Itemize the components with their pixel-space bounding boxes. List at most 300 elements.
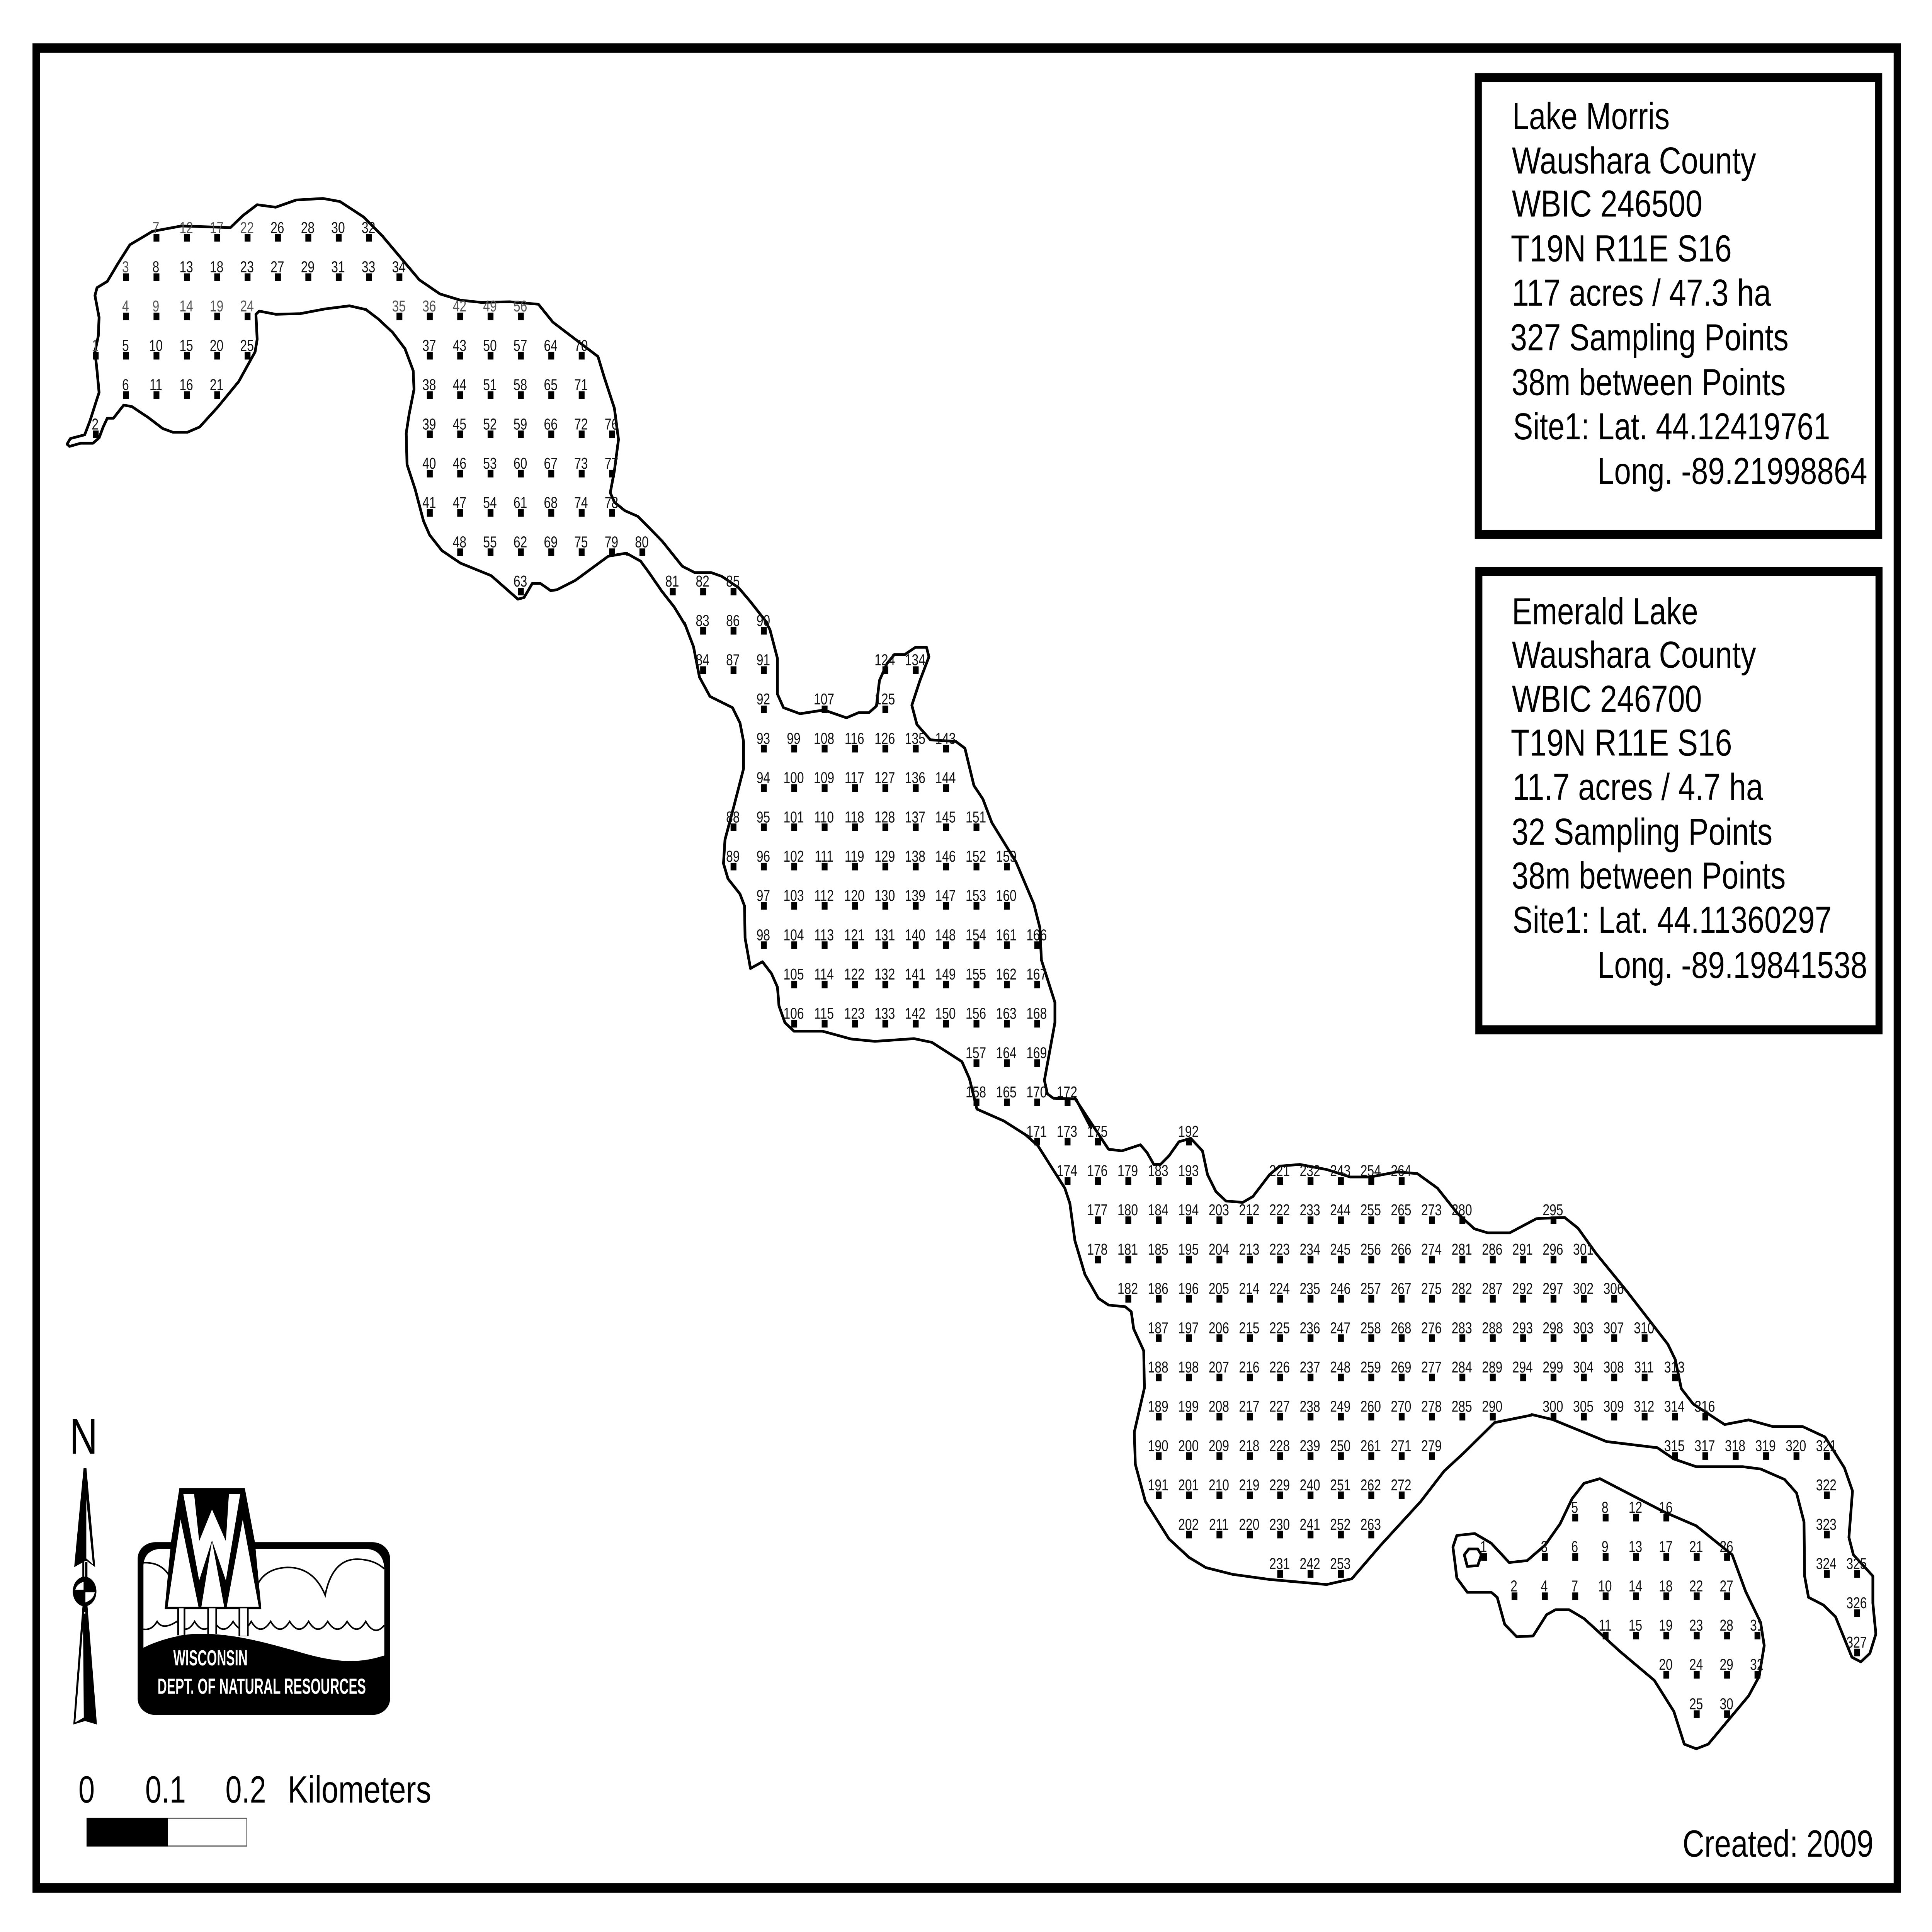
- sampling points: Lake Morris 1-327: 26: [270, 219, 284, 236]
- sampling points: Lake Morris 1-327: 290: [1482, 1398, 1502, 1415]
- sampling points: Lake Morris 1-327: 199: [1178, 1398, 1199, 1415]
- sampling points: Lake Morris 1-327: 123: [844, 1005, 865, 1022]
- sampling points: Lake Morris 1-327: 303: [1573, 1319, 1594, 1337]
- sampling points: Lake Morris 1-327: 44: [453, 376, 466, 394]
- sampling points: Lake Morris 1-327: 170: [1026, 1083, 1047, 1101]
- sampling points: Lake Morris 1-327: 241: [1300, 1515, 1320, 1533]
- panel: Emerald Lake info: [1479, 571, 1879, 1030]
- sampling points: Lake Morris 1-327: 261: [1361, 1437, 1381, 1454]
- text block: Emerald Lake details: 11.7 acres / 4.7 ha: [1512, 766, 1764, 808]
- sampling points: Lake Morris 1-327: 285: [1452, 1398, 1472, 1415]
- logo text: Dept. of Natural Resources: DEPT. OF NATURAL RESOURCES: [158, 1674, 366, 1699]
- sampling points: Lake Morris 1-327: 165: [996, 1083, 1017, 1101]
- sampling points: Lake Morris 1-327: 192: [1178, 1122, 1199, 1140]
- sampling points: Lake Morris 1-327: 63: [514, 572, 527, 590]
- sampling points: Lake Morris 1-327: 173: [1057, 1122, 1077, 1140]
- sampling points: Lake Morris 1-327: 213: [1239, 1240, 1259, 1258]
- sampling points: Lake Morris 1-327: 176: [1087, 1162, 1108, 1179]
- sampling points: Lake Morris 1-327: 106: [783, 1005, 804, 1022]
- sampling points: Lake Morris 1-327: 139: [905, 887, 925, 905]
- sampling points: Lake Morris 1-327: 137: [905, 808, 925, 826]
- sampling points: Lake Morris 1-327: 203: [1209, 1201, 1229, 1219]
- sampling points: Lake Morris 1-327: 86: [726, 612, 740, 629]
- sampling points: Lake Morris 1-327: 270: [1391, 1398, 1411, 1415]
- logo: Wisconsin DNR: [138, 1488, 390, 1715]
- sampling points: Lake Morris 1-327: 299: [1543, 1358, 1563, 1376]
- sampling points: Lake Morris 1-327: 280: [1452, 1201, 1472, 1219]
- sampling points: Lake Morris 1-327: 234: [1300, 1240, 1320, 1258]
- sampling points: Lake Morris 1-327: 327: [1846, 1633, 1867, 1651]
- shoreline: Lake Morris western lobe north shore: [67, 199, 619, 502]
- sampling points: Emerald Lake 1-32: 3: [1541, 1538, 1548, 1556]
- sampling points: Lake Morris 1-327: 233: [1300, 1201, 1320, 1219]
- sampling points: Lake Morris 1-327: 298: [1543, 1319, 1563, 1337]
- sampling points: Lake Morris 1-327: 25: [240, 337, 254, 354]
- sampling points: Lake Morris 1-327: 18: [210, 258, 223, 276]
- sampling points: Lake Morris 1-327: 314: [1664, 1398, 1685, 1415]
- text block: Lake Morris details: [1510, 140, 1867, 492]
- sampling points: Lake Morris 1-327: 191: [1148, 1476, 1168, 1494]
- sampling points: Lake Morris 1-327: 204: [1209, 1240, 1229, 1258]
- text block: Emerald Lake details: [1511, 634, 1867, 986]
- sampling points: Lake Morris 1-327: 252: [1330, 1515, 1350, 1533]
- created date: Created: 2009: [1683, 1823, 1873, 1865]
- sampling points: Lake Morris 1-327: 108: [814, 730, 834, 747]
- sampling points: Lake Morris 1-327: 256: [1361, 1240, 1381, 1258]
- sampling points: Lake Morris 1-327: 227: [1269, 1398, 1290, 1415]
- sampling points: Lake Morris 1-327: 273: [1421, 1201, 1442, 1219]
- sampling points: Lake Morris 1-327: 250: [1330, 1437, 1350, 1454]
- sampling points: Lake Morris 1-327: 89: [726, 847, 740, 865]
- sampling points: Lake Morris 1-327: 181: [1117, 1240, 1138, 1258]
- sampling points: Lake Morris 1-327: 79: [605, 533, 618, 551]
- panel border: [1478, 78, 1879, 534]
- sampling points: Emerald Lake 1-32: 18: [1659, 1577, 1673, 1595]
- sampling points: Lake Morris 1-327: 289: [1482, 1358, 1502, 1376]
- sampling points: Lake Morris 1-327: 193: [1178, 1162, 1199, 1179]
- shoreline: narrows south shore: [627, 554, 685, 625]
- sampling points: Lake Morris 1-327: 36: [422, 297, 436, 315]
- sampling points: Emerald Lake 1-32: 9: [1602, 1538, 1609, 1556]
- sampling points: Lake Morris 1-327: 54: [483, 494, 497, 512]
- sampling points: Lake Morris 1-327: 167: [1026, 965, 1047, 983]
- sampling points: Lake Morris 1-327: 274: [1421, 1240, 1442, 1258]
- sampling points: Lake Morris 1-327: 196: [1178, 1280, 1199, 1298]
- text block: Emerald Lake details: 38m between Points: [1512, 855, 1786, 897]
- sampling points: Lake Morris 1-327: 116: [845, 730, 864, 747]
- sampling points: Lake Morris 1-327: [92, 219, 1867, 1656]
- sampling points: Lake Morris 1-327: 4: [122, 297, 129, 315]
- sampling points: Lake Morris 1-327: 272: [1391, 1476, 1411, 1494]
- sampling points: Lake Morris 1-327: 286: [1482, 1240, 1502, 1258]
- sampling points: Lake Morris 1-327: 113: [814, 926, 834, 944]
- sampling points: Lake Morris 1-327: 152: [966, 847, 986, 865]
- sampling points: Lake Morris 1-327: 306: [1604, 1280, 1624, 1298]
- sampling points: Lake Morris 1-327: 99: [787, 730, 801, 747]
- sampling points: Lake Morris 1-327: 215: [1239, 1319, 1259, 1337]
- sampling points: Lake Morris 1-327: 75: [574, 533, 588, 551]
- sampling points: Lake Morris 1-327: 67: [544, 454, 558, 472]
- sampling points: Lake Morris 1-327: 15: [179, 337, 193, 354]
- north arrow: [70, 1408, 98, 1725]
- sampling points: Lake Morris 1-327: 60: [514, 454, 527, 472]
- sampling points: Lake Morris 1-327: 43: [453, 337, 466, 354]
- sampling points: Lake Morris 1-327: 140: [905, 926, 925, 944]
- sampling points: Lake Morris 1-327: 48: [453, 533, 466, 551]
- sampling points: Lake Morris 1-327: 232: [1300, 1162, 1320, 1179]
- sampling points: Lake Morris 1-327: 84: [696, 651, 709, 668]
- sampling points: Lake Morris 1-327: 102: [783, 847, 804, 865]
- sampling points: Emerald Lake 1-32: 13: [1629, 1538, 1642, 1556]
- sampling points: Lake Morris 1-327: 223: [1269, 1240, 1290, 1258]
- sampling points: Lake Morris 1-327: 249: [1330, 1398, 1350, 1415]
- sampling points: Lake Morris 1-327: 91: [757, 651, 770, 668]
- text block: Lake Morris details: 327 Sampling Points: [1510, 316, 1789, 359]
- sampling points: Lake Morris 1-327: 180: [1117, 1201, 1138, 1219]
- sampling points: Lake Morris 1-327: 22: [240, 219, 254, 236]
- sampling points: Lake Morris 1-327: 150: [935, 1005, 956, 1022]
- sampling points: Emerald Lake 1-32: 27: [1719, 1577, 1733, 1595]
- sampling points: Lake Morris 1-327: 236: [1300, 1319, 1320, 1337]
- sampling points: Lake Morris 1-327: 231: [1269, 1555, 1290, 1572]
- sampling points: Lake Morris 1-327: 53: [483, 454, 497, 472]
- sampling points: Lake Morris 1-327: 28: [301, 219, 315, 236]
- sampling points: Emerald Lake 1-32: 10: [1598, 1577, 1612, 1595]
- sampling points: Lake Morris 1-327: 73: [574, 454, 588, 472]
- sampling points: Lake Morris 1-327: 294: [1512, 1358, 1533, 1376]
- sampling points: Lake Morris 1-327: 293: [1512, 1319, 1533, 1337]
- scale label 0.1: 0.1: [145, 1768, 186, 1811]
- sampling points: Lake Morris 1-327: 240: [1300, 1476, 1320, 1494]
- text block: Lake Morris details: Waushara County: [1512, 140, 1756, 182]
- sampling points: Emerald Lake 1-32: 30: [1719, 1695, 1733, 1713]
- sampling points: Lake Morris 1-327: 87: [726, 651, 740, 668]
- sampling points: Emerald Lake 1-32: 25: [1689, 1695, 1703, 1713]
- sampling points: Emerald Lake 1-32: [1480, 1498, 1764, 1718]
- sampling points: Lake Morris 1-327: 235: [1300, 1280, 1320, 1298]
- sampling points: Lake Morris 1-327: 19: [210, 297, 223, 315]
- sampling points: Lake Morris 1-327: 311: [1634, 1358, 1654, 1376]
- sampling points: Lake Morris 1-327: 190: [1148, 1437, 1168, 1454]
- sampling points: Lake Morris 1-327: 300: [1543, 1398, 1563, 1415]
- sampling points: Lake Morris 1-327: 35: [392, 297, 406, 315]
- sampling points: Lake Morris 1-327: 245: [1330, 1240, 1350, 1258]
- scale bar: [78, 1768, 431, 1846]
- sampling points: Lake Morris 1-327: 287: [1482, 1280, 1502, 1298]
- sampling points: Lake Morris 1-327: 212: [1239, 1201, 1259, 1219]
- sampling points: Lake Morris 1-327: 310: [1634, 1319, 1654, 1337]
- sampling points: Lake Morris 1-327: 148: [935, 926, 956, 944]
- sampling points: Lake Morris 1-327: 127: [874, 769, 895, 787]
- sampling points: Lake Morris 1-327: 90: [757, 612, 770, 629]
- sampling points: Lake Morris 1-327: 49: [483, 297, 497, 315]
- text block: Emerald Lake details: T19N R11E S16: [1511, 722, 1732, 764]
- sampling points: Lake Morris 1-327: 38: [422, 376, 436, 394]
- sampling points: Emerald Lake 1-32: 4: [1541, 1577, 1548, 1595]
- sampling points: Lake Morris 1-327: 39: [422, 415, 436, 433]
- sampling points: Lake Morris 1-327: 246: [1330, 1280, 1350, 1298]
- sampling points: Lake Morris 1-327: 211: [1209, 1515, 1229, 1533]
- sampling points: Lake Morris 1-327: 216: [1239, 1358, 1259, 1376]
- sampling points: Lake Morris 1-327: 195: [1178, 1240, 1199, 1258]
- sampling points: Lake Morris 1-327: 147: [935, 887, 956, 905]
- sampling points: Emerald Lake 1-32: 11: [1599, 1616, 1611, 1634]
- sampling points: Lake Morris 1-327: 45: [453, 415, 466, 433]
- sampling points: Lake Morris 1-327: 269: [1391, 1358, 1411, 1376]
- sampling points: Lake Morris 1-327: 229: [1269, 1476, 1290, 1494]
- sampling points: Lake Morris 1-327: 70: [574, 337, 588, 354]
- sampling points: Emerald Lake 1-32: 1: [1480, 1538, 1487, 1556]
- sampling points: Emerald Lake 1-32: 5: [1571, 1498, 1578, 1516]
- sampling points: Lake Morris 1-327: 10: [149, 337, 163, 354]
- sampling points: Lake Morris 1-327: 283: [1452, 1319, 1472, 1337]
- sampling points: Lake Morris 1-327: 324: [1816, 1555, 1837, 1572]
- sampling points: Lake Morris 1-327: 171: [1026, 1122, 1047, 1140]
- sampling points: Lake Morris 1-327: 177: [1087, 1201, 1108, 1219]
- shoreline: narrows north shore: [615, 502, 767, 622]
- sampling points: Emerald Lake 1-32: 22: [1689, 1577, 1703, 1595]
- sampling points: Lake Morris 1-327: 94: [757, 769, 770, 787]
- sampling points: Lake Morris 1-327: 117: [845, 769, 864, 787]
- text block: Lake Morris details: T19N R11E S16: [1511, 228, 1732, 270]
- sampling points: Lake Morris 1-327: 145: [935, 808, 956, 826]
- sampling points: Lake Morris 1-327: 222: [1269, 1201, 1290, 1219]
- sampling points: Lake Morris 1-327: 151: [966, 808, 986, 826]
- sampling points: Lake Morris 1-327: 207: [1209, 1358, 1229, 1376]
- sampling points: Lake Morris 1-327: 88: [726, 808, 740, 826]
- sampling points: Lake Morris 1-327: 159: [996, 847, 1017, 865]
- sampling points: Lake Morris 1-327: 255: [1361, 1201, 1381, 1219]
- sampling points: Emerald Lake 1-32: 2: [1510, 1577, 1517, 1595]
- sampling points: Lake Morris 1-327: 126: [874, 730, 895, 747]
- sampling points: Lake Morris 1-327: 238: [1300, 1398, 1320, 1415]
- sampling points: Lake Morris 1-327: 59: [514, 415, 527, 433]
- panel border: [1479, 571, 1879, 1030]
- sampling points: Lake Morris 1-327: 308: [1604, 1358, 1624, 1376]
- sampling points: Lake Morris 1-327: 174: [1057, 1162, 1077, 1179]
- logo artwork: [138, 1488, 390, 1715]
- sampling points: Lake Morris 1-327: 122: [844, 965, 865, 983]
- sampling points: Emerald Lake 1-32: 24: [1689, 1656, 1703, 1673]
- sampling points: Lake Morris 1-327: 183: [1148, 1162, 1168, 1179]
- sampling points: Lake Morris 1-327: 58: [514, 376, 527, 394]
- sampling points: Lake Morris 1-327: 282: [1452, 1280, 1472, 1298]
- sampling points: Lake Morris 1-327: 262: [1361, 1476, 1381, 1494]
- shoreline: central basin south shore: [684, 623, 1029, 1137]
- sampling points: Lake Morris 1-327: 81: [665, 572, 679, 590]
- sampling points: Lake Morris 1-327: 136: [905, 769, 925, 787]
- sampling points: Lake Morris 1-327: 258: [1361, 1319, 1381, 1337]
- sampling points: Lake Morris 1-327: 153: [966, 887, 986, 905]
- sampling points: Lake Morris 1-327: 277: [1421, 1358, 1442, 1376]
- sampling points: Lake Morris 1-327: 142: [905, 1005, 925, 1022]
- sampling points: Lake Morris 1-327: 276: [1421, 1319, 1442, 1337]
- sampling points: Lake Morris 1-327: 169: [1026, 1044, 1047, 1061]
- sampling points: Lake Morris 1-327: 157: [966, 1044, 986, 1061]
- sampling points: Lake Morris 1-327: 264: [1391, 1162, 1411, 1179]
- scale bar graphic: [87, 1818, 247, 1846]
- sampling points: Lake Morris 1-327: 297: [1543, 1280, 1563, 1298]
- sampling points: Lake Morris 1-327: 128: [874, 808, 895, 826]
- sampling points: Lake Morris 1-327: 166: [1026, 926, 1047, 944]
- sampling points: Lake Morris 1-327: 33: [362, 258, 375, 276]
- shoreline: eastern basin north shore: [1075, 1099, 1536, 1233]
- sampling points: Lake Morris 1-327: 2: [92, 415, 99, 433]
- sampling points: Lake Morris 1-327: 197: [1178, 1319, 1199, 1337]
- sampling points: Lake Morris 1-327: 13: [179, 258, 193, 276]
- sampling points: Lake Morris 1-327: 92: [757, 690, 770, 708]
- sampling points: Lake Morris 1-327: 42: [453, 297, 466, 315]
- sampling points: Lake Morris 1-327: 161: [996, 926, 1017, 944]
- sampling points: Lake Morris 1-327: 208: [1209, 1398, 1229, 1415]
- sampling points: Lake Morris 1-327: 21: [210, 376, 223, 394]
- shoreline: eastern arm: [1532, 1218, 1876, 1662]
- sampling points: Lake Morris 1-327: 138: [905, 847, 925, 865]
- sampling points: Lake Morris 1-327: 309: [1604, 1398, 1624, 1415]
- sampling points: Emerald Lake 1-32: 31: [1750, 1616, 1764, 1634]
- sampling points: Lake Morris 1-327: 198: [1178, 1358, 1199, 1376]
- heading: Emerald Lake: Emerald Lake: [1512, 590, 1698, 633]
- sampling points: Lake Morris 1-327: 243: [1330, 1162, 1350, 1179]
- sampling points: Lake Morris 1-327: 220: [1239, 1515, 1259, 1533]
- sampling points: Lake Morris 1-327: 162: [996, 965, 1017, 983]
- sampling points: Lake Morris 1-327: 319: [1755, 1437, 1776, 1454]
- sampling points: Lake Morris 1-327: 163: [996, 1005, 1017, 1022]
- sampling points: Lake Morris 1-327: 57: [514, 337, 527, 354]
- sampling points: Lake Morris 1-327: 111: [815, 847, 833, 865]
- sampling points: Lake Morris 1-327: 189: [1148, 1398, 1168, 1415]
- sampling points: Lake Morris 1-327: 41: [422, 494, 436, 512]
- sampling points: Lake Morris 1-327: 7: [153, 219, 159, 236]
- sampling points: Lake Morris 1-327: 160: [996, 887, 1017, 905]
- sampling points: Lake Morris 1-327: 68: [544, 494, 558, 512]
- sampling points: Lake Morris 1-327: 288: [1482, 1319, 1502, 1337]
- sampling points: Emerald Lake 1-32: 29: [1719, 1656, 1733, 1673]
- sampling points: Lake Morris 1-327: 226: [1269, 1358, 1290, 1376]
- sampling points: Lake Morris 1-327: 129: [874, 847, 895, 865]
- sampling points: Lake Morris 1-327: 101: [783, 808, 804, 826]
- text block: Emerald Lake details: Site1: Lat. 44.11360297: [1512, 899, 1832, 941]
- sampling points: Lake Morris 1-327: 143: [935, 730, 956, 747]
- text block: Lake Morris details: Site1: Lat. 44.12419761: [1513, 406, 1830, 447]
- sampling points: Lake Morris 1-327: 132: [874, 965, 895, 983]
- sampling points: Lake Morris 1-327: 135: [905, 730, 925, 747]
- sampling points: Lake Morris 1-327: 312: [1634, 1398, 1654, 1415]
- sampling points: Lake Morris 1-327: 23: [240, 258, 254, 276]
- sampling points: Lake Morris 1-327: 217: [1239, 1398, 1259, 1415]
- shoreline: central basin north shore: [765, 621, 1091, 1128]
- sampling points: Lake Morris 1-327: 172: [1057, 1083, 1077, 1101]
- sampling points: Lake Morris 1-327: 105: [783, 965, 804, 983]
- sampling points: Lake Morris 1-327: 50: [483, 337, 497, 354]
- sampling points: Emerald Lake 1-32: 17: [1659, 1538, 1673, 1556]
- text block: Lake Morris details: 38m between Points: [1512, 361, 1786, 403]
- sampling points: Lake Morris 1-327: 291: [1512, 1240, 1533, 1258]
- sampling points: Lake Morris 1-327: 6: [122, 376, 129, 394]
- sampling points: Lake Morris 1-327: 46: [453, 454, 466, 472]
- sampling points: Lake Morris 1-327: 292: [1512, 1280, 1533, 1298]
- shoreline: Emerald Lake: [1453, 1479, 1764, 1749]
- sampling points: Lake Morris 1-327: 187: [1148, 1319, 1168, 1337]
- sampling points: Lake Morris 1-327: 76: [605, 415, 618, 433]
- sampling points: Lake Morris 1-327: 51: [483, 376, 497, 394]
- sampling points: Lake Morris 1-327: 247: [1330, 1319, 1350, 1337]
- sampling points: Lake Morris 1-327: 95: [757, 808, 770, 826]
- sampling points: Lake Morris 1-327: 266: [1391, 1240, 1411, 1258]
- sampling points: Lake Morris 1-327: 64: [544, 337, 558, 354]
- sampling points: Lake Morris 1-327: 318: [1725, 1437, 1745, 1454]
- sampling points: Lake Morris 1-327: 218: [1239, 1437, 1259, 1454]
- sampling points: Lake Morris 1-327: 131: [874, 926, 895, 944]
- sampling points: Lake Morris 1-327: 295: [1543, 1201, 1563, 1219]
- sampling points: Emerald Lake 1-32: 28: [1719, 1616, 1733, 1634]
- sampling points: Lake Morris 1-327: 34: [392, 258, 406, 276]
- sampling points: Lake Morris 1-327: 109: [814, 769, 834, 787]
- text block: Emerald Lake details: Long. -89.19841538: [1597, 944, 1867, 986]
- sampling points: Lake Morris 1-327: 316: [1694, 1398, 1715, 1415]
- sampling points: Lake Morris 1-327: 130: [874, 887, 895, 905]
- sampling points: Lake Morris 1-327: 188: [1148, 1358, 1168, 1376]
- sampling points: Lake Morris 1-327: 322: [1816, 1476, 1837, 1494]
- sampling points: Lake Morris 1-327: 24: [240, 297, 254, 315]
- sampling points: Lake Morris 1-327: 321: [1816, 1437, 1837, 1454]
- sampling points: Lake Morris 1-327: 133: [874, 1005, 895, 1022]
- sampling points: Lake Morris 1-327: 257: [1361, 1280, 1381, 1298]
- sampling points: Lake Morris 1-327: 209: [1209, 1437, 1229, 1454]
- sampling points: Lake Morris 1-327: 206: [1209, 1319, 1229, 1337]
- sampling points: Lake Morris 1-327: 200: [1178, 1437, 1199, 1454]
- sampling points: Lake Morris 1-327: 253: [1330, 1555, 1350, 1572]
- sampling points: Lake Morris 1-327: 202: [1178, 1515, 1199, 1533]
- sampling points: Lake Morris 1-327: 37: [422, 337, 436, 354]
- shoreline: eastern basin south shore: [1025, 1134, 1531, 1585]
- sampling points: Lake Morris 1-327: 118: [845, 808, 864, 826]
- scale label 0: 0: [78, 1768, 95, 1811]
- sampling points: Lake Morris 1-327: 20: [210, 337, 223, 354]
- sampling points: Emerald Lake 1-32: 14: [1629, 1577, 1642, 1595]
- sampling points: Lake Morris 1-327: 315: [1664, 1437, 1685, 1454]
- sampling points: Lake Morris 1-327: 134: [905, 651, 925, 668]
- sampling points: Lake Morris 1-327: 146: [935, 847, 956, 865]
- sampling points: Lake Morris 1-327: 164: [996, 1044, 1017, 1061]
- sampling points: Lake Morris 1-327: 72: [574, 415, 588, 433]
- sampling points: Lake Morris 1-327: 100: [783, 769, 804, 787]
- sampling points: Lake Morris 1-327: 141: [905, 965, 925, 983]
- sampling points: Lake Morris 1-327: 112: [814, 887, 834, 905]
- sampling points: Lake Morris 1-327: 5: [122, 337, 129, 354]
- sampling points: Emerald Lake 1-32: 19: [1659, 1616, 1673, 1634]
- sampling points: Lake Morris 1-327: 237: [1300, 1358, 1320, 1376]
- text block: Emerald Lake details: WBIC 246700: [1512, 678, 1702, 720]
- sampling points: Lake Morris 1-327: 275: [1421, 1280, 1442, 1298]
- sampling points: Lake Morris 1-327: 3: [122, 258, 129, 276]
- sampling points: Lake Morris 1-327: 296: [1543, 1240, 1563, 1258]
- sampling points: Lake Morris 1-327: 56: [514, 297, 527, 315]
- sampling points: Lake Morris 1-327: 210: [1209, 1476, 1229, 1494]
- sampling points: Emerald Lake 1-32: 20: [1659, 1656, 1673, 1673]
- sampling points: Lake Morris 1-327: 16: [179, 376, 193, 394]
- sampling points: Lake Morris 1-327: 9: [153, 297, 159, 315]
- sampling points: Lake Morris 1-327: 107: [814, 690, 834, 708]
- sampling points: Lake Morris 1-327: 12: [179, 219, 193, 236]
- sampling points: Lake Morris 1-327: 1: [92, 337, 99, 354]
- sampling points: Lake Morris 1-327: 149: [935, 965, 956, 983]
- sampling points: Emerald Lake 1-32: 15: [1629, 1616, 1642, 1634]
- sampling points: Lake Morris 1-327: 103: [783, 887, 804, 905]
- sampling points: Lake Morris 1-327: 83: [696, 612, 709, 629]
- sampling points: Lake Morris 1-327: 155: [966, 965, 986, 983]
- sampling points: Lake Morris 1-327: 248: [1330, 1358, 1350, 1376]
